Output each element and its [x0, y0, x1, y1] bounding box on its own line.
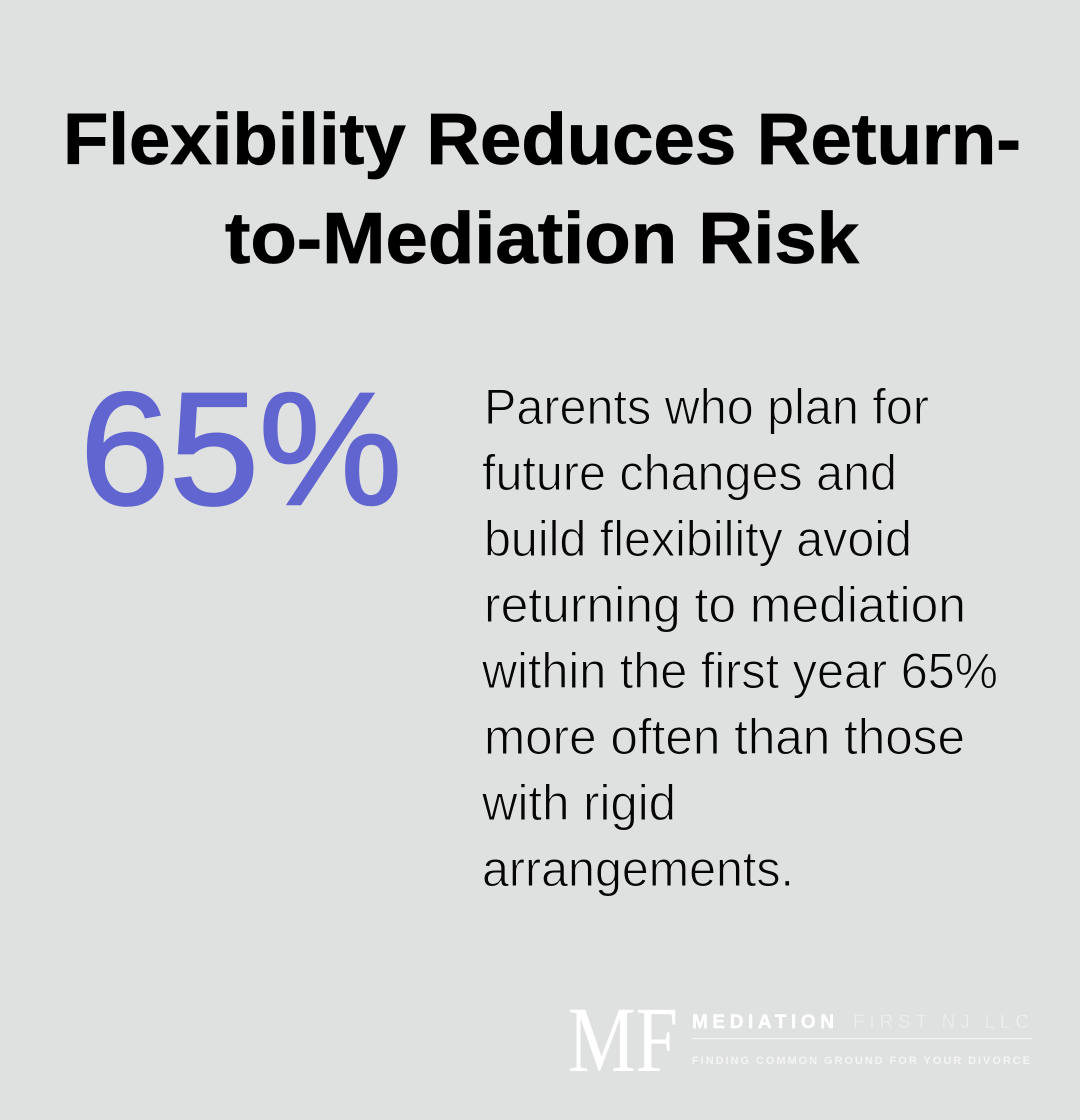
description text: with rigid	[481, 775, 676, 831]
description text	[481, 379, 998, 897]
title: Flexibility Reduces Return-	[63, 100, 1021, 180]
title: to-Mediation Risk	[225, 199, 860, 279]
description text: arrangements.	[482, 841, 794, 897]
logo monogram: MF	[568, 989, 678, 1092]
logo tagline: FINDING COMMON GROUND FOR YOUR DIVORCE	[692, 1055, 1030, 1067]
description text: build flexibility avoid	[484, 511, 912, 567]
description text: returning to mediation	[484, 577, 966, 633]
logo company name: FIRST NJ LLC	[853, 1012, 1029, 1033]
big statistic: 65%: 65%	[80, 359, 402, 538]
description text: Parents who plan for	[484, 379, 929, 435]
description text: more often than those	[484, 709, 965, 765]
logo: Mediation First NJ LLC	[568, 989, 1032, 1092]
description text: within the first year 65%	[481, 643, 998, 699]
logo company name: MEDIATION	[692, 1012, 834, 1033]
description text: future changes and	[482, 445, 897, 501]
logo company name	[692, 1012, 1029, 1033]
title	[63, 100, 1021, 279]
